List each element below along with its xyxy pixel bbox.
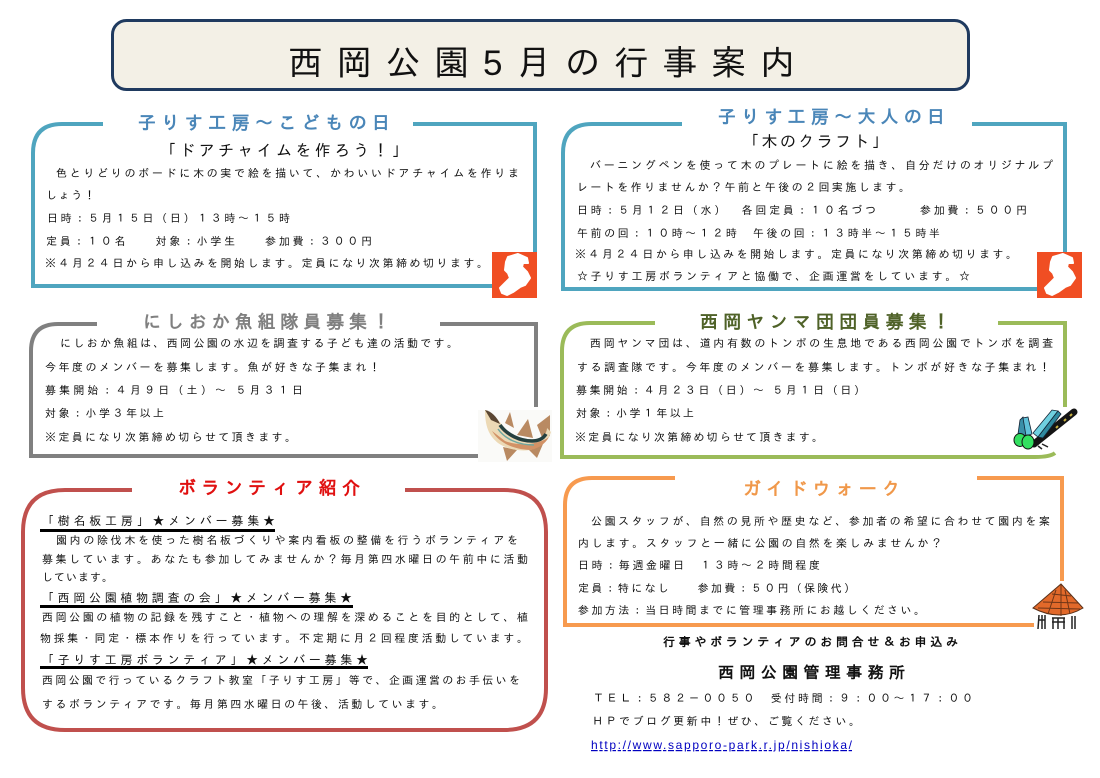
text block: plant survey group: 物採集・同定・標本作りを行っています。不定期に月２回程度活動しています。 <box>40 632 528 645</box>
icon: park house <box>1033 584 1083 629</box>
text block: kids craft details: 日時：５月１５日（日）１３時～１５時 <box>47 213 290 225</box>
text block: guided walk details: 参加方法：当日時間までに管理事務所にお越しください。 <box>578 604 925 617</box>
heading: kids craft day: 子りす工房～こどもの日 <box>138 113 390 133</box>
text block: fish survey details <box>45 337 458 444</box>
heading: dragonfly survey team: 西岡ヤンマ団団員募集！ <box>700 312 950 332</box>
text block: adult craft details: バーニングペンを使って木のプレートに絵を描き、自分だけのオリジナルプ <box>590 159 1053 172</box>
text block: dragonfly survey details: 募集開始：４月２３日（日）～ ５月１日（日） <box>576 384 865 397</box>
text block: nameplate workshop: 「樹名板工房」★メンバー募集★ <box>42 514 275 528</box>
panel: kids craft day <box>33 113 537 298</box>
text block: adult craft details: レートを作りませんか？午前と午後の２回実施します。 <box>577 181 910 194</box>
text block: adult craft details: ☆子りす工房ボランティアと協働で、企画運営をしています。☆ <box>577 270 970 283</box>
heading: fish survey team: にしおか魚組隊員募集！ <box>143 312 390 332</box>
title banner <box>112 20 968 90</box>
text block: kids craft details: ※４月２４日から申し込みを開始します。定員になり次第締め切ります。 <box>45 257 488 270</box>
text block: nameplate workshop: 募集しています。あなたも参加してみませんか？毎月第四水曜日の午前中に活動 <box>42 553 528 566</box>
text block: plant survey group: 西岡公園の植物の記録を残すこと・植物への理解を深めることを目的として、植 <box>42 611 528 624</box>
text block: fish survey details: 対象：小学３年以上 <box>45 407 164 420</box>
panel: guided walk <box>565 478 1083 629</box>
text block: adult craft details <box>575 159 1053 283</box>
text block: fish survey details: 募集開始：４月９日（土）～ ５月３１日 <box>45 384 303 397</box>
text block: dragonfly survey details: 西岡ヤンマ団は、道内有数のトンボの生息地である西岡公園でトンボを調査 <box>590 337 1053 350</box>
icon: squirrel logo <box>492 252 537 298</box>
text block: craft volunteers: 「子りす工房ボランティア」★メンバー募集★ <box>42 653 368 667</box>
heading: guided walk: ガイドウォーク <box>743 479 900 499</box>
title banner: 西岡公園5月の行事案内 <box>288 44 795 83</box>
text block: guided walk details: 内します。スタッフと一緒に公園の自然を楽しみませんか？ <box>578 537 942 550</box>
subheading: wood craft: 「木のクラフト」 <box>743 134 888 151</box>
text block: fish survey details: 今年度のメンバーを募集します。魚が好きな子集まれ！ <box>45 361 380 374</box>
text block: nameplate workshop: しています。 <box>42 572 113 584</box>
text block: adult craft details: ※４月２４日から申し込みを開始します。定員になり次第締め切ります。 <box>575 248 1017 261</box>
heading: adult craft day: 子りす工房～大人の日 <box>718 107 945 127</box>
text block: kids craft details: 色とりどりのボードに木の実で絵を描いて、かわいいドアチャイムを作りま <box>56 167 519 180</box>
office name: 西岡公園管理事務所 <box>718 663 905 682</box>
contact block <box>591 635 973 752</box>
text block: guided walk details <box>578 515 1050 617</box>
text block: kids craft details: しょう！ <box>46 190 95 202</box>
text block: dragonfly survey details <box>575 337 1053 444</box>
text block: adult craft details: 日時：５月１２日（水） 各回定員：１０名づつ 参加費：５００円 <box>577 204 1027 217</box>
text block: plant survey group <box>40 591 528 645</box>
text block: craft volunteers <box>40 653 520 711</box>
text block: fish survey details: にしおか魚組は、西岡公園の水辺を調査する子ども達の活動です。 <box>60 337 458 350</box>
text block: dragonfly survey details: する調査隊です。今年度のメンバーを募集します。トンボが好きな子集まれ！ <box>577 361 1050 374</box>
subheading: door chime: 「ドアチャイムを作ろう！」 <box>160 142 408 160</box>
text block: guided walk details: 公園スタッフが、自然の見所や歴史など、参加者の希望に合わせて園内を案 <box>591 515 1050 528</box>
panel: volunteer introduction <box>23 478 546 730</box>
text block: nameplate workshop: 園内の除伐木を使った樹名板づくりや案内看板の整備を行うボランティアを <box>56 534 518 547</box>
text block: guided walk details: 定員：特になし 参加費：５０円（保険代） <box>578 582 855 595</box>
text block: fish survey details: ※定員になり次第締め切らせて頂きます。 <box>45 431 296 444</box>
icon: fish <box>478 410 552 462</box>
text block: dragonfly survey details: ※定員になり次第締め切らせて頂きます。 <box>575 431 823 444</box>
heading: volunteer introduction: ボランティア紹介 <box>178 478 360 498</box>
text block: kids craft details <box>45 167 519 270</box>
icon: dragonfly <box>1014 410 1074 449</box>
text block: dragonfly survey details: 対象：小学１年以上 <box>576 407 694 420</box>
text block: kids craft details: 定員：１０名 対象：小学生 参加費：３００円 <box>46 235 372 248</box>
panel: adult craft day <box>563 107 1082 298</box>
text block: nameplate workshop <box>40 514 528 584</box>
panel: fish survey team <box>31 312 552 462</box>
text block: craft volunteers: 西岡公園で行っているクラフト教室「子りす工房」等で、企画運営のお手伝いを <box>42 674 520 687</box>
panel: dragonfly survey team <box>562 312 1074 457</box>
icon: squirrel logo <box>1037 252 1082 298</box>
text block: plant survey group: 「西岡公園植物調査の会」★メンバー募集★ <box>42 591 352 605</box>
text block: guided walk details: 日時：毎週金曜日 １３時～２時間程度 <box>578 559 820 572</box>
phone and hours: ＴＥＬ：５８２－００５０ 受付時間：９：００～１７：００ <box>593 692 973 705</box>
text block: craft volunteers: するボランティアです。毎月第四水曜日の午後、活動しています。 <box>42 698 443 711</box>
blog notice: ＨＰでブログ更新中！ぜひ、ご覧ください。 <box>592 715 860 728</box>
website address: http://www.sapporo-park.r.jp/nishioka/ <box>591 738 853 752</box>
text block: adult craft details: 午前の回：１０時～１２時 午後の回：１３時半～１５時半 <box>577 227 940 240</box>
contact heading: 行事やボランティアのお問合せ＆お申込み <box>663 635 958 649</box>
